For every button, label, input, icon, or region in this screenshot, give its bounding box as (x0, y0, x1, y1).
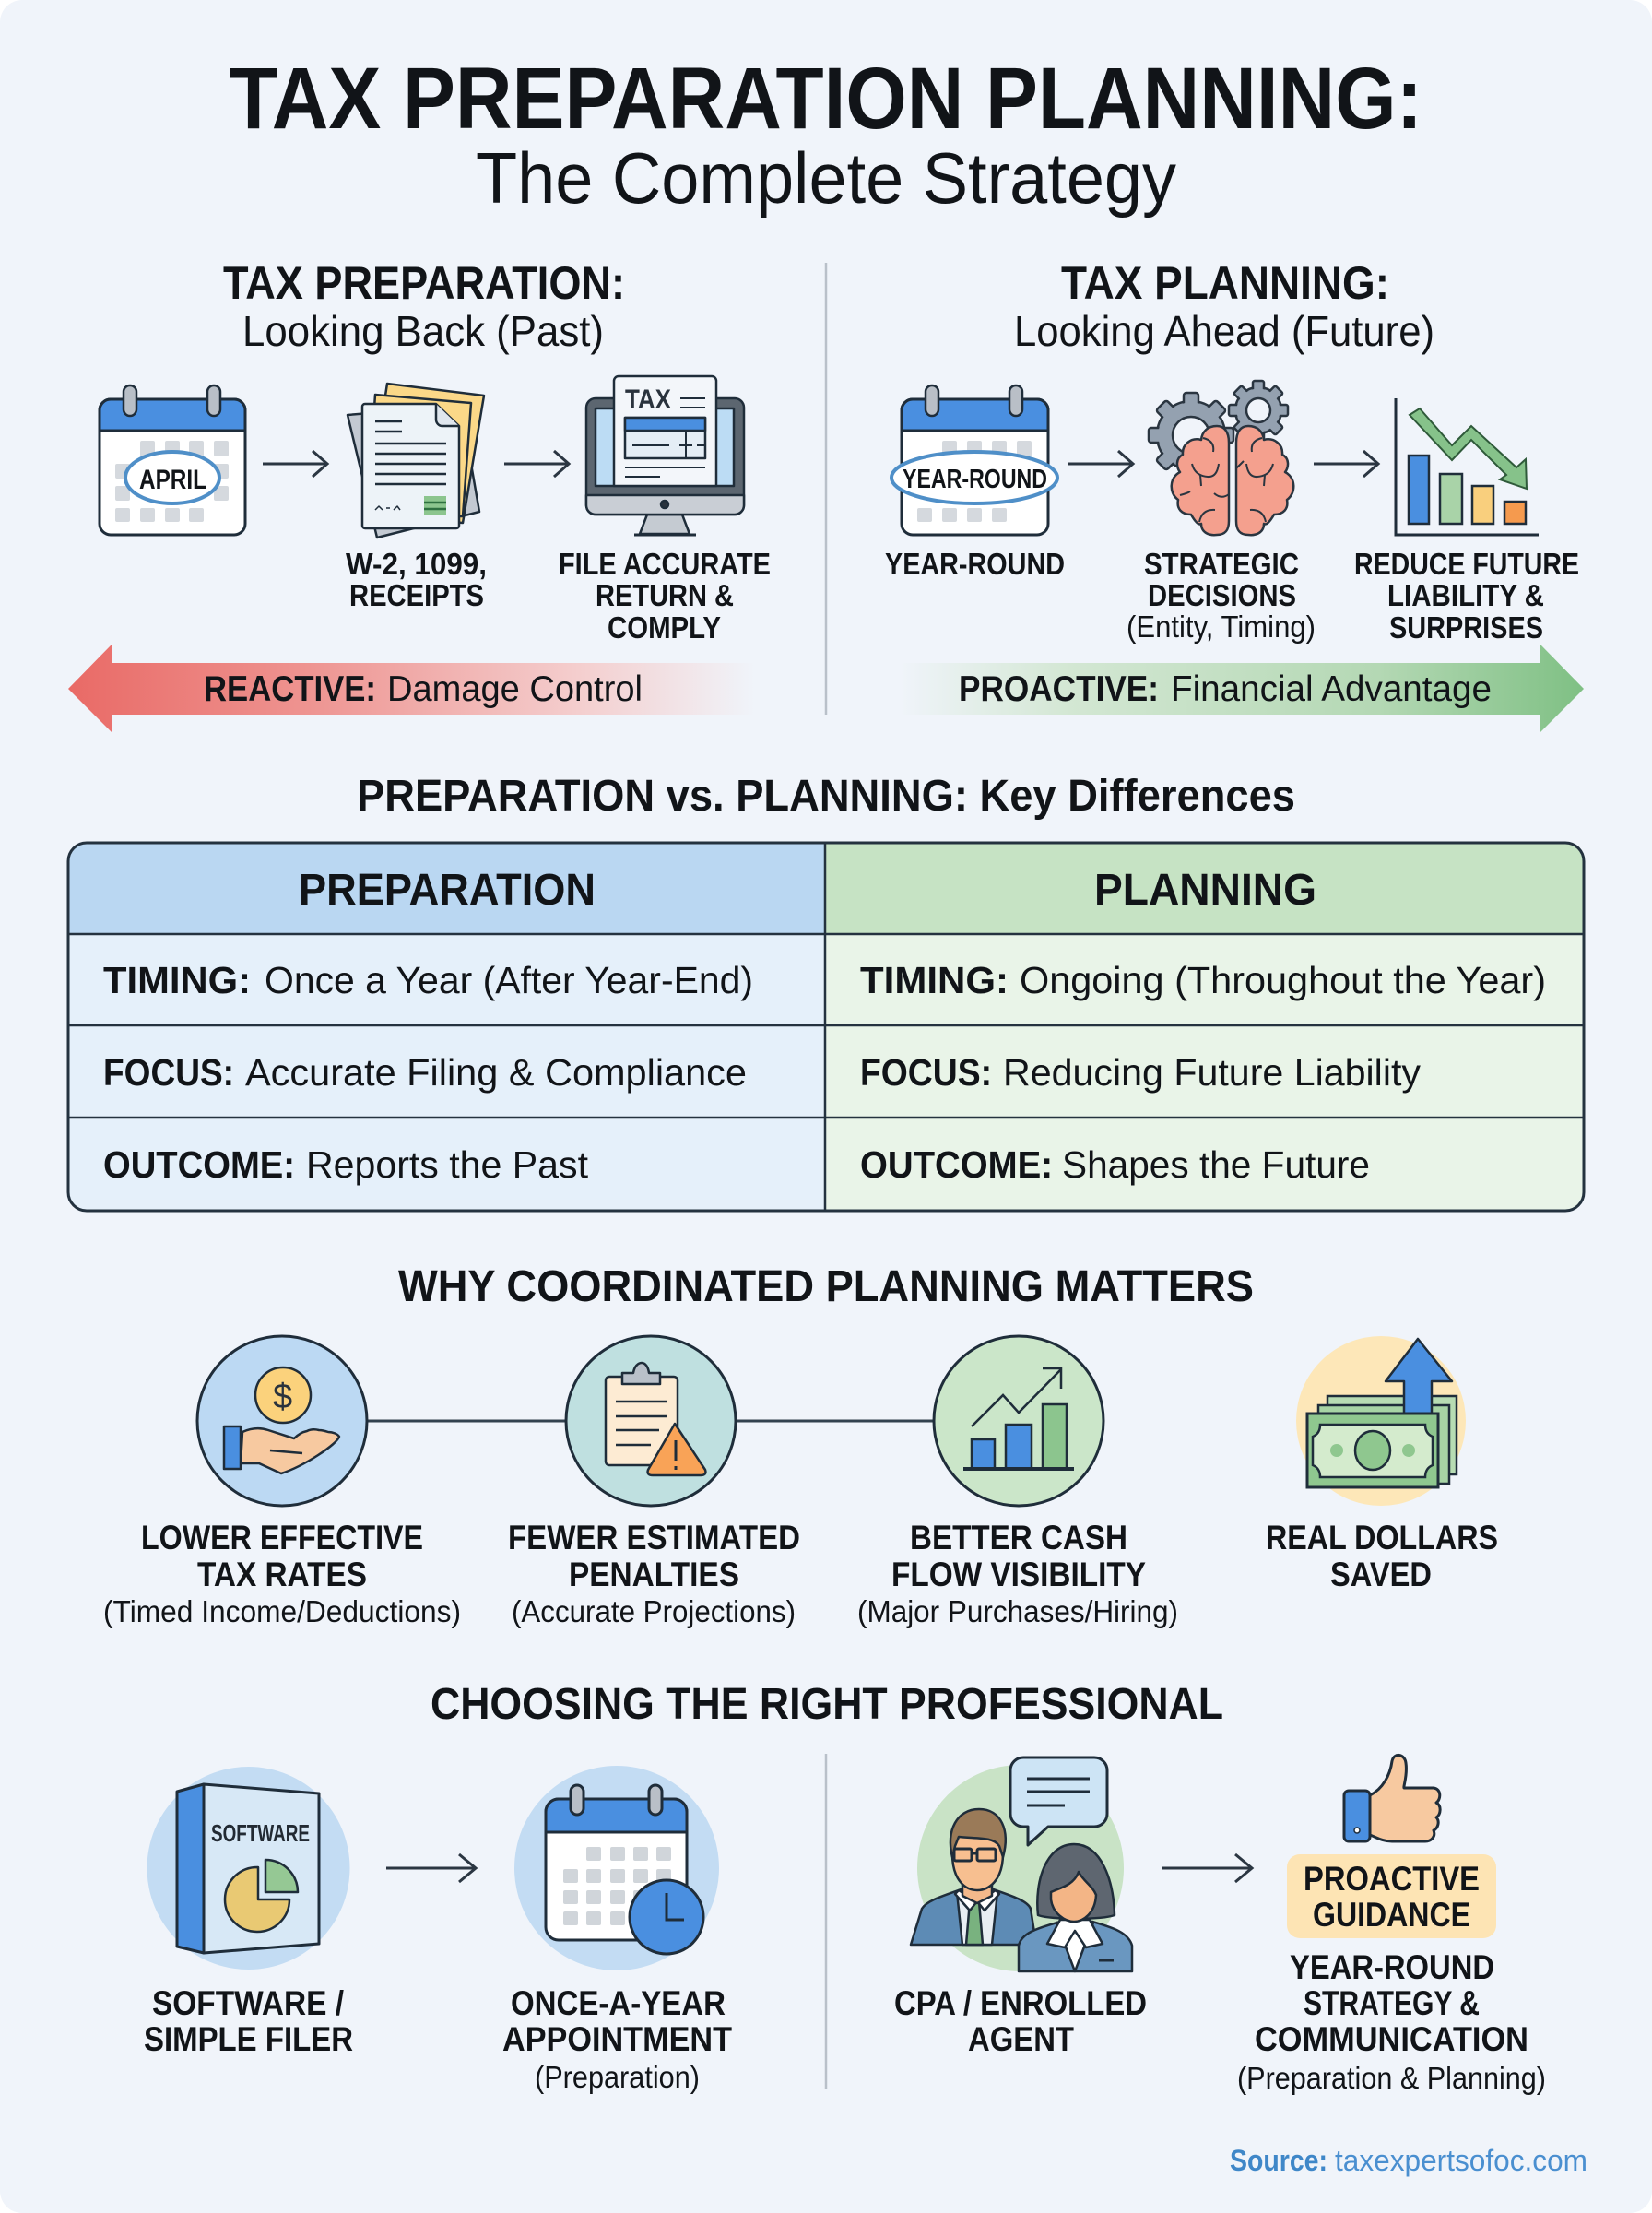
label: reduce future liability: SURPRISES (1389, 610, 1543, 645)
label: lower effective tax rates: (Timed Income/Deductions) (103, 1594, 461, 1628)
heading: key differences: PREPARATION vs. PLANNING: Key Differences (357, 772, 1295, 821)
comparison table: OUTCOME: (103, 1143, 295, 1186)
icon: coin in hand: $ (273, 1378, 292, 1416)
label: fewer estimated penalties: (Accurate Projections) (512, 1594, 796, 1628)
label: better cash flow visibility (857, 1519, 1178, 1628)
label: fewer estimated penalties: FEWER ESTIMATED (508, 1519, 800, 1556)
arrow banner: proactive: Financial Advantage (1171, 669, 1492, 709)
comparison table: FOCUS: (860, 1051, 992, 1094)
icon: money and up arrow (1296, 1336, 1466, 1506)
arrow (504, 451, 569, 477)
source line: taxexpertsofoc.com (1335, 2144, 1587, 2177)
comparison table: Ongoing (Throughout the Year) (1020, 959, 1546, 1001)
label: once-a-year appointment: (Preparation) (535, 2060, 700, 2094)
arrow (1068, 451, 1133, 477)
icon: tax return on monitor: TAX (625, 385, 671, 415)
comparison table: Shapes the Future (1062, 1143, 1370, 1186)
label: CPA enrolled agent: CPA / ENROLLED (894, 1984, 1147, 2022)
badge: proactive guidance: PROACTIVE (1304, 1860, 1480, 1898)
label: real dollars saved: SAVED (1330, 1556, 1432, 1593)
heading: tax preparation: Looking Back (Past) (242, 307, 604, 355)
label: once-a-year appointment (502, 1984, 732, 2094)
label: strategic decisions: DECISIONS (1148, 578, 1296, 612)
title (230, 50, 1422, 219)
label: W-2, 1099, receipts: W-2, 1099, (346, 547, 487, 581)
icon: year-round calendar: YEAR-ROUND (903, 465, 1047, 494)
icon: thumbs up (1344, 1755, 1440, 1841)
label: better cash flow visibility: (Major Purchases/Hiring) (857, 1594, 1178, 1628)
comparison table: PLANNING (1094, 866, 1316, 915)
icon: calendar with clock (514, 1766, 719, 1970)
arrow banner: proactive (899, 645, 1584, 732)
label: strategic decisions: STRATEGIC (1144, 547, 1299, 581)
label: once-a-year appointment: ONCE-A-YEAR (511, 1984, 726, 2022)
label: file accurate return (559, 547, 771, 645)
icon: software box (148, 1767, 350, 1970)
icon: falling bar chart (1396, 398, 1539, 535)
comparison table: FOCUS: (103, 1051, 234, 1094)
title: The Complete Strategy (476, 137, 1176, 219)
icon: year-round calendar (891, 385, 1057, 535)
label: reduce future liability: REDUCE FUTURE (1354, 547, 1579, 581)
arrow banner: reactive: Damage Control (387, 669, 643, 709)
label: year-round strategy (1237, 1948, 1546, 2095)
label: better cash flow visibility: BETTER CASH (910, 1519, 1127, 1556)
label: software simple filer: SOFTWARE / (152, 1984, 344, 2022)
heading: tax planning: Looking Ahead (Future) (1014, 307, 1434, 355)
divider bottom (825, 1754, 827, 2089)
label: fewer estimated penalties (508, 1519, 800, 1628)
arrow (1162, 1854, 1252, 1882)
label: real dollars saved: REAL DOLLARS (1266, 1519, 1498, 1556)
title: TAX PREPARATION PLANNING: (230, 50, 1422, 148)
heading: choosing the right professional: CHOOSING THE RIGHT PROFESSIONAL (431, 1680, 1223, 1729)
icon: CPA professionals with speech bubble (911, 1757, 1132, 1971)
label: strategic decisions: (Entity, Timing) (1127, 609, 1316, 644)
heading: tax preparation: TAX PREPARATION: (223, 257, 625, 309)
label: file accurate return: COMPLY (608, 610, 721, 645)
label: reduce future liability: LIABILITY & (1387, 578, 1544, 612)
heading: tax planning: TAX PLANNING: (1061, 257, 1389, 309)
label: real dollars saved (1266, 1519, 1498, 1593)
comparison table: Reducing Future Liability (1003, 1051, 1421, 1094)
label: year-round strategy: STRATEGY & (1304, 1984, 1480, 2022)
divider top (825, 263, 827, 715)
comparison table: Once a Year (After Year-End) (265, 959, 753, 1001)
label: W-2, 1099, receipts: RECEIPTS (349, 578, 484, 612)
arrow banner: reactive: REACTIVE: (204, 669, 376, 709)
source line: Source: (1230, 2144, 1328, 2177)
connector line (367, 1420, 933, 1422)
badge: proactive guidance: GUIDANCE (1313, 1896, 1470, 1934)
label: file accurate return: FILE ACCURATE (559, 547, 771, 581)
icon: April calendar (100, 385, 245, 535)
label: once-a-year appointment: APPOINTMENT (502, 2020, 732, 2058)
icon: April calendar: APRIL (139, 465, 206, 495)
icon: tax return on monitor (586, 376, 744, 535)
label: lower effective tax rates: TAX RATES (197, 1556, 367, 1593)
label: CPA enrolled agent: AGENT (968, 2020, 1074, 2058)
icon: brain and gears (1149, 381, 1293, 535)
comparison table: TIMING: (860, 959, 1009, 1001)
comparison table: PREPARATION (299, 866, 596, 915)
label: year-round strategy: YEAR-ROUND (1290, 1948, 1494, 1986)
icon: documents (348, 384, 484, 538)
label: fewer estimated penalties: PENALTIES (569, 1556, 739, 1593)
label: software simple filer: SIMPLE FILER (144, 2020, 353, 2058)
arrow banner: proactive: PROACTIVE: (959, 669, 1159, 709)
label: year-round: YEAR-ROUND (885, 547, 1065, 581)
label: year-round strategy: (Preparation & Planning) (1237, 2061, 1546, 2095)
source line (1230, 2144, 1587, 2177)
icon: coin in hand (197, 1336, 367, 1506)
label: better cash flow visibility: FLOW VISIBILITY (891, 1556, 1146, 1593)
heading: tax planning (1014, 257, 1434, 355)
comparison table: OUTCOME: (860, 1143, 1053, 1186)
label: reduce future liability (1354, 547, 1579, 645)
arrow banner: reactive (68, 645, 755, 732)
label: lower effective tax rates: LOWER EFFECTIVE (141, 1519, 423, 1556)
label: CPA enrolled agent (894, 1984, 1147, 2058)
label: strategic decisions (1127, 547, 1316, 644)
icon: software box: SOFTWARE (211, 1819, 310, 1847)
comparison table: Reports the Past (306, 1143, 589, 1186)
label: lower effective tax rates (103, 1519, 461, 1628)
icon: clipboard with warning (566, 1336, 736, 1506)
label: W-2, 1099, receipts (346, 547, 487, 612)
label: software simple filer (144, 1984, 353, 2058)
label: file accurate return: RETURN & (596, 578, 734, 612)
label: year-round strategy: COMMUNICATION (1255, 2020, 1528, 2058)
icon: growth chart (934, 1336, 1103, 1506)
arrow (1314, 451, 1378, 477)
comparison table: Accurate Filing & Compliance (245, 1051, 747, 1094)
badge: proactive guidance (1287, 1854, 1496, 1938)
arrow (386, 1854, 476, 1882)
heading: tax preparation (223, 257, 625, 355)
comparison table: TIMING: (103, 959, 251, 1001)
heading: why coordinated planning matters: WHY COORDINATED PLANNING MATTERS (398, 1262, 1254, 1311)
arrow (263, 451, 327, 477)
comparison table (68, 843, 1584, 1211)
